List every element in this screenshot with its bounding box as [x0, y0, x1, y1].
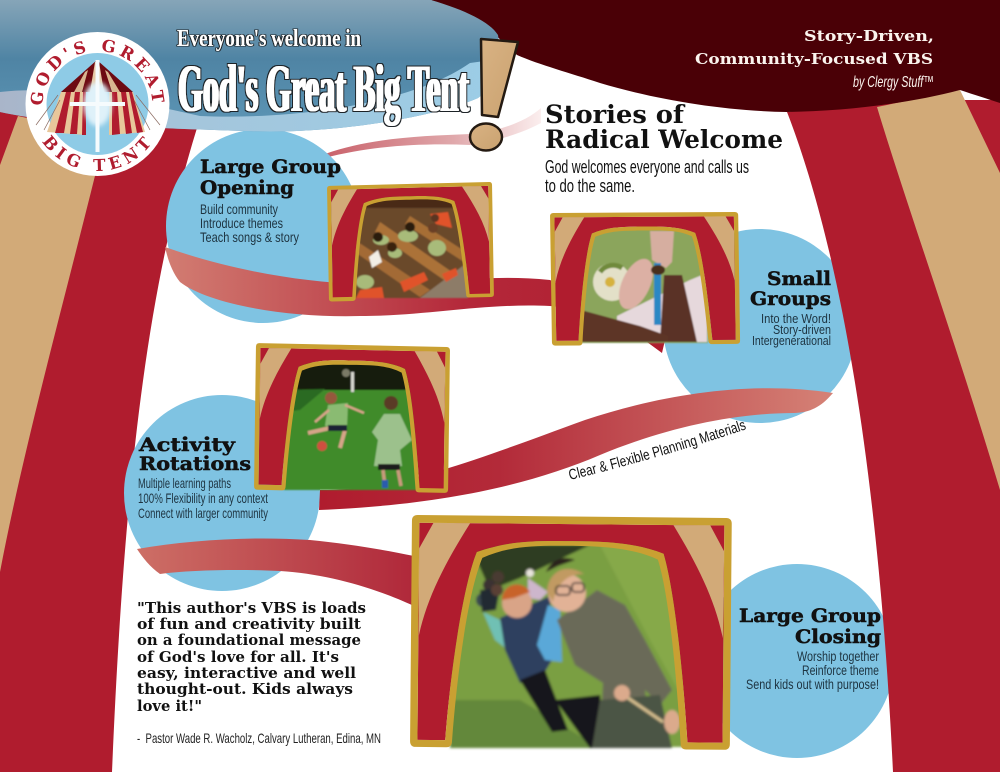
text: large group opening: Teach songs & story [200, 229, 299, 245]
text: large group closing: Worship together [797, 648, 879, 664]
text: activity rotations: Rotations [139, 453, 251, 475]
ribbon: thin top ribbon [325, 108, 541, 158]
circle: large group closing [700, 564, 894, 758]
text: activity rotations: Multiple learning paths [138, 475, 231, 491]
logo text top: GOD'S GREAT [30, 40, 165, 105]
frame: small groups photo [550, 212, 740, 346]
text: small groups [750, 268, 831, 348]
text: activity rotations [138, 434, 268, 521]
text: God's Great Big Tent [178, 50, 469, 126]
text: large group opening [200, 156, 341, 245]
frame: large group opening photo [327, 182, 494, 302]
testimonial attribution: - Pastor Wade R. Wacholz, Calvary Lutheran, Edina, MN [137, 730, 381, 746]
tagline: by Clergy Stuff™ [853, 74, 934, 91]
heading: stories of radical welcome: to do the same. [545, 176, 635, 196]
ribbon: activity to closing [137, 538, 414, 606]
photo: children playing soccer [284, 362, 418, 490]
header title [177, 26, 469, 126]
text: large group closing: Reinforce theme [802, 662, 879, 678]
photo: hands with craft stick [578, 228, 708, 343]
text: small groups: Intergenerational [752, 334, 831, 348]
ribbon: activity to small groups [319, 388, 833, 510]
header banner [0, 0, 499, 132]
text: large group closing: Closing [795, 626, 881, 648]
testimonial quote: on a foundational message [137, 631, 361, 649]
frame: large group closing photo [410, 515, 732, 750]
testimonial quote: easy, interactive and well [137, 664, 356, 682]
text: activity rotations: 100% Flexibility in any context [138, 490, 268, 506]
right tent stripes and maroon header [431, 0, 1000, 772]
text: large group opening: Introduce themes [200, 215, 283, 231]
photo: church pews [352, 194, 468, 298]
exclamation mark [470, 39, 518, 150]
text: small groups: Story-driven [773, 323, 831, 337]
photo: tug of war [450, 538, 684, 748]
circle: large group opening [166, 129, 360, 323]
testimonial quote: of fun and creativity built [137, 615, 361, 633]
circle: activity rotations [124, 395, 320, 591]
text: large group opening: Large Group [200, 156, 341, 178]
testimonial quote: "This author's VBS is loads [137, 599, 366, 617]
testimonial quote [137, 599, 366, 715]
frame: activity rotations photo [254, 343, 450, 494]
heading: stories of radical welcome: God welcomes everyone and calls us [545, 157, 749, 177]
text: large group opening: Opening [200, 177, 294, 199]
text: large group closing: Large Group [739, 605, 881, 627]
text: small groups: Small [767, 268, 831, 290]
text: activity rotations: Activity [138, 434, 236, 456]
tagline: Community-Focused VBS [695, 50, 933, 68]
heading: stories of radical welcome: Radical Welcome [545, 125, 783, 154]
tagline [695, 27, 934, 91]
ribbon: opening to small groups [165, 247, 665, 353]
circle: small groups [663, 229, 857, 423]
heading: stories of radical welcome: Stories of [545, 100, 686, 129]
text: large group closing: Send kids out with purpose! [746, 676, 879, 692]
tent illustration [36, 60, 160, 152]
testimonial quote: thought-out. Kids always [137, 680, 353, 698]
text: activity rotations: Connect with larger community [138, 505, 268, 521]
tagline: Story-Driven, [804, 27, 934, 45]
heading: stories of radical welcome [545, 100, 783, 196]
logo text bottom: BIG TENT [42, 134, 150, 171]
testimonial quote: of God's love for all. It's [137, 648, 339, 666]
testimonial quote: love it!" [137, 697, 202, 715]
logo badge [26, 32, 170, 176]
text: large group opening: Build community [200, 201, 278, 217]
left tent stripes [0, 100, 197, 772]
text: large group closing [739, 605, 881, 692]
header title: Everyone's welcome in [177, 26, 361, 52]
ribbon label: Clear & Flexible Planning Materials [569, 420, 746, 480]
text: small groups: Into the Word! [761, 312, 831, 326]
text: small groups: Groups [750, 288, 831, 310]
